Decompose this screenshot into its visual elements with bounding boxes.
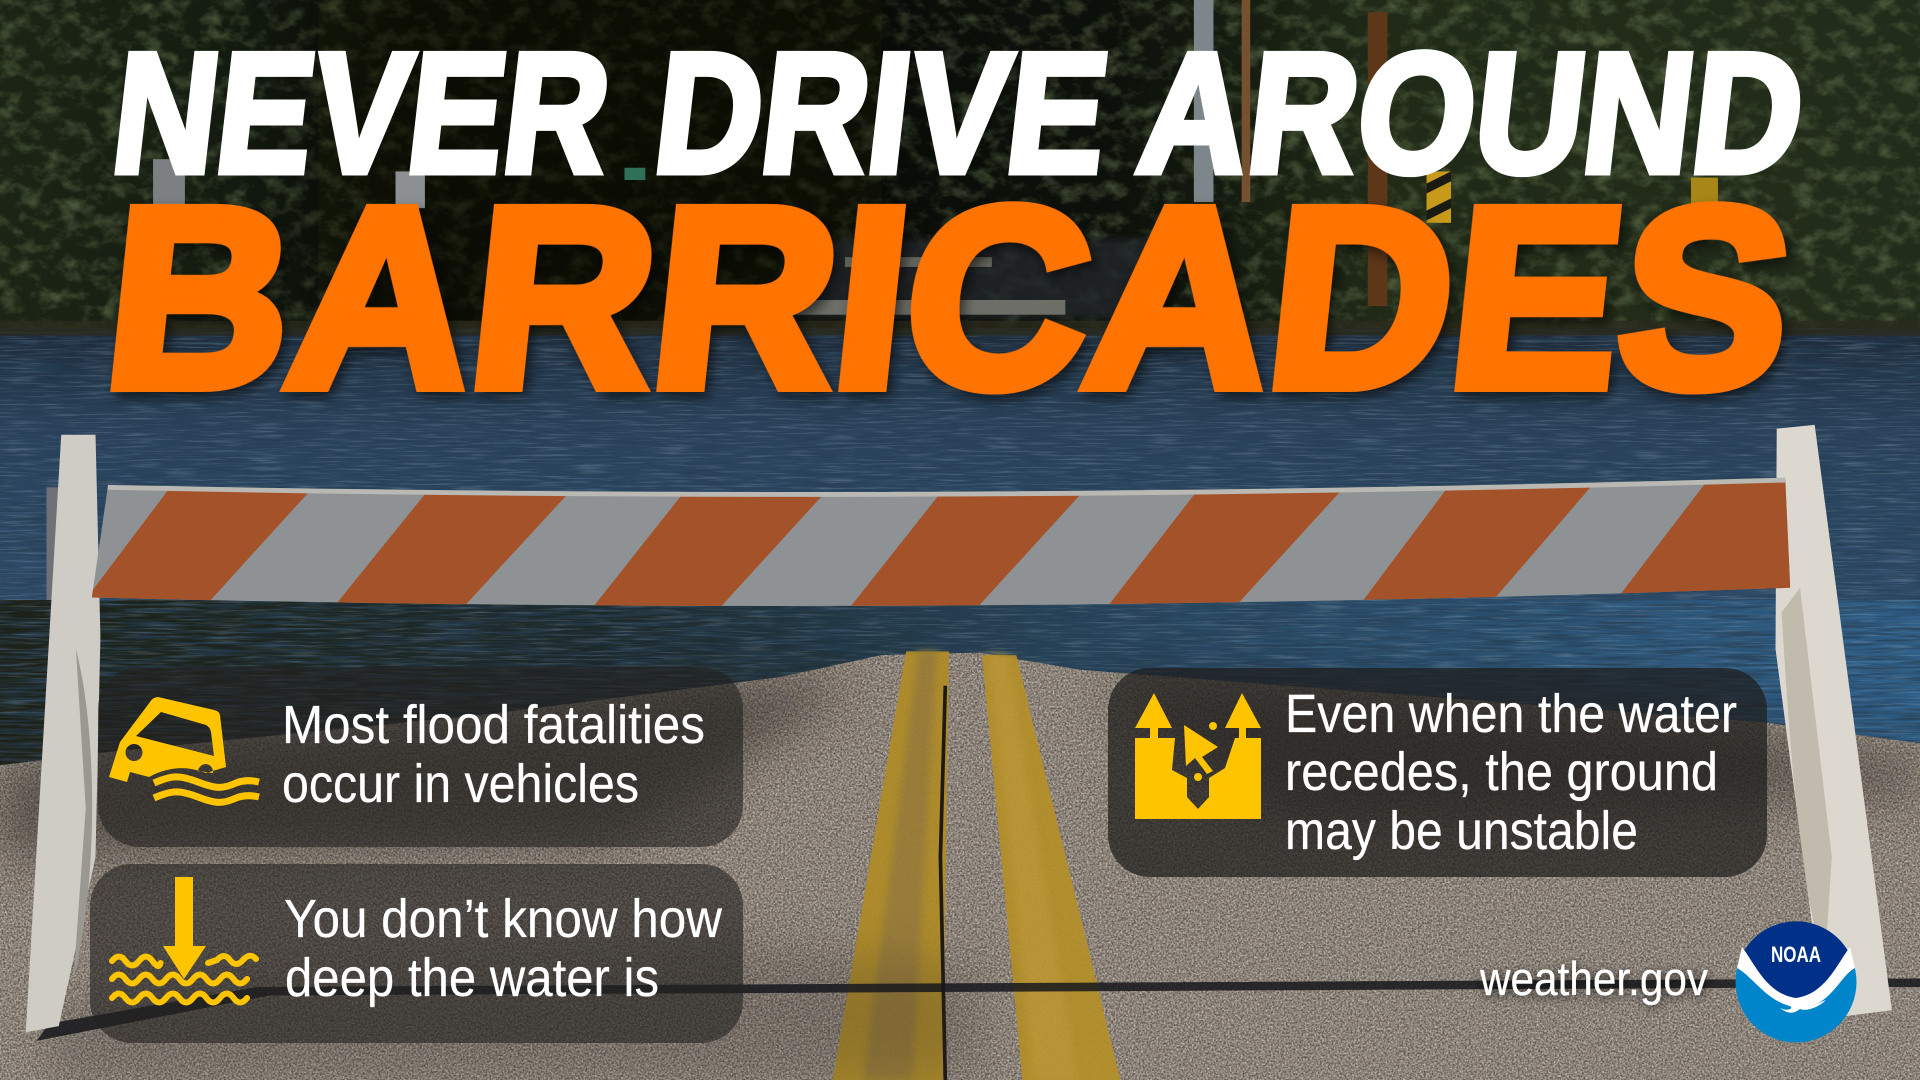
flooded road surface <box>0 649 1920 1080</box>
icon: arrow into waves <box>112 877 256 1002</box>
text: unstable ground: recedes, the ground <box>1285 742 1718 802</box>
icon: car in water <box>109 697 259 802</box>
panel: unstable ground <box>1108 668 1767 877</box>
word: drive: DRIVE <box>646 18 1117 209</box>
word: never: NEVER <box>104 18 619 209</box>
text: water depth <box>284 889 723 1008</box>
text: most flood fatalities: Most flood fatalities <box>282 695 705 755</box>
trees <box>0 0 1920 367</box>
text: water depth: deep the water is <box>285 948 659 1008</box>
barricade left post <box>26 435 100 1032</box>
panel: flood fatalities <box>98 667 743 847</box>
distant road and signs <box>153 0 1718 318</box>
text: unstable ground <box>1285 684 1737 861</box>
double yellow centre lines <box>833 651 1120 1080</box>
barricade shadow on road <box>37 978 1920 1041</box>
text: most flood fatalities <box>282 695 705 814</box>
text: unstable ground: Even when the water <box>1285 684 1737 744</box>
barricade striped board <box>92 478 1790 606</box>
heading: never drive around <box>104 18 1813 209</box>
text: unstable ground: may be unstable <box>1285 801 1638 861</box>
text: most flood fatalities: occur in vehicles <box>282 754 639 814</box>
flood water <box>0 321 1920 771</box>
panel: water depth <box>90 864 743 1043</box>
barricade right post <box>1776 425 1892 1019</box>
website url: weather.gov <box>1479 952 1708 1005</box>
icon: cracked ground with arrows <box>1135 693 1261 819</box>
NOAA wordmark: NOAA <box>1771 942 1821 967</box>
word: around: AROUND <box>1130 18 1813 209</box>
text: water depth: You don’t know how <box>284 889 723 949</box>
heading: barricades: BARRICADES <box>94 156 1804 441</box>
NOAA logo <box>1736 921 1856 1042</box>
